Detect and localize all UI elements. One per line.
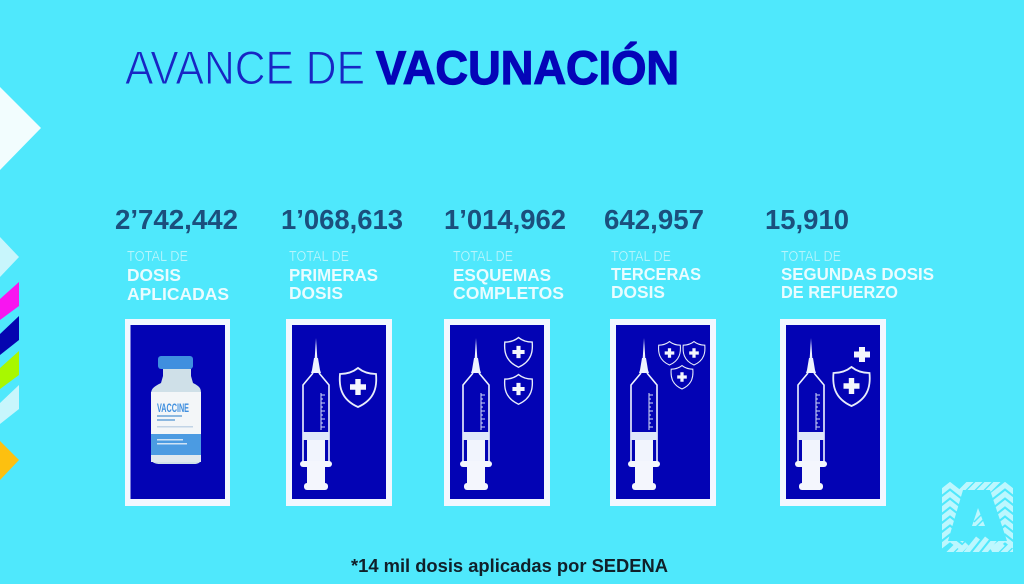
icon: syringe xyxy=(300,338,332,490)
footnote: *14 mil dosis aplicadas por SEDENA xyxy=(351,555,668,576)
label: DOSIS xyxy=(611,282,665,302)
label: ESQUEMAS xyxy=(453,265,551,285)
icon: syringe xyxy=(795,338,827,490)
icon: plus xyxy=(854,347,870,362)
panel: syringe and two shields xyxy=(444,319,550,506)
icon: shield right xyxy=(683,342,705,365)
label xyxy=(127,248,229,304)
icon: shield top xyxy=(505,338,532,367)
icon: shield xyxy=(833,367,870,406)
title: VACUNACIÓN xyxy=(376,41,679,94)
label: SEGUNDAS DOSIS xyxy=(781,264,934,284)
label: TOTAL DE xyxy=(611,248,671,265)
icon: navy stripe xyxy=(0,316,19,355)
icon: vaccine vial xyxy=(151,356,201,464)
column 4: terceras dosis xyxy=(604,204,716,506)
icon: magenta stripe xyxy=(0,282,19,320)
column 5: segundas dosis de refuerzo xyxy=(765,204,934,506)
icon: shield lower xyxy=(671,366,693,389)
icon: shield bottom xyxy=(505,375,532,404)
label: DOSIS xyxy=(127,265,181,285)
icon: vaccine vial: VACCINE xyxy=(157,401,189,415)
label: APLICADAS xyxy=(127,284,229,304)
label: TERCERAS xyxy=(611,264,701,284)
number: 2’742,442 xyxy=(115,204,238,235)
panel: syringe and three shields xyxy=(610,319,716,506)
panel: syringe, shield and plus xyxy=(780,319,886,506)
icon: syringe xyxy=(460,338,492,490)
label: DE REFUERZO xyxy=(781,282,898,302)
panel: syringe and one shield xyxy=(286,319,392,506)
title xyxy=(125,41,679,94)
label: PRIMERAS xyxy=(289,265,378,285)
label: COMPLETOS xyxy=(453,283,564,303)
column 1: total dosis aplicadas xyxy=(115,204,238,506)
label xyxy=(453,248,564,303)
icon: syringe xyxy=(628,338,660,490)
icon: pale stripe xyxy=(0,385,19,424)
number: 1’014,962 xyxy=(444,204,566,235)
number: 1’068,613 xyxy=(281,204,403,235)
column 3: esquemas completos xyxy=(444,204,566,506)
icon: yellow arrow xyxy=(0,441,19,480)
label: TOTAL DE xyxy=(289,248,349,265)
icon: large white arrow xyxy=(0,87,41,170)
icon: pale arrow xyxy=(0,237,19,277)
label xyxy=(781,248,934,302)
logo xyxy=(942,482,1013,552)
icon: shield left xyxy=(659,342,680,365)
label: TOTAL DE xyxy=(453,248,513,265)
number: 15,910 xyxy=(765,204,849,235)
label xyxy=(611,248,701,302)
panel: vaccine vial xyxy=(125,319,230,506)
label: TOTAL DE xyxy=(127,248,188,265)
label: TOTAL DE xyxy=(781,248,841,265)
label xyxy=(289,248,378,303)
column 2: primeras dosis xyxy=(281,204,403,506)
decorative left chevrons xyxy=(0,87,41,480)
icon: lime stripe xyxy=(0,351,19,389)
title: AVANCE DE xyxy=(125,41,365,94)
icon: shield xyxy=(340,368,376,407)
label: DOSIS xyxy=(289,283,343,303)
number: 642,957 xyxy=(604,204,704,235)
